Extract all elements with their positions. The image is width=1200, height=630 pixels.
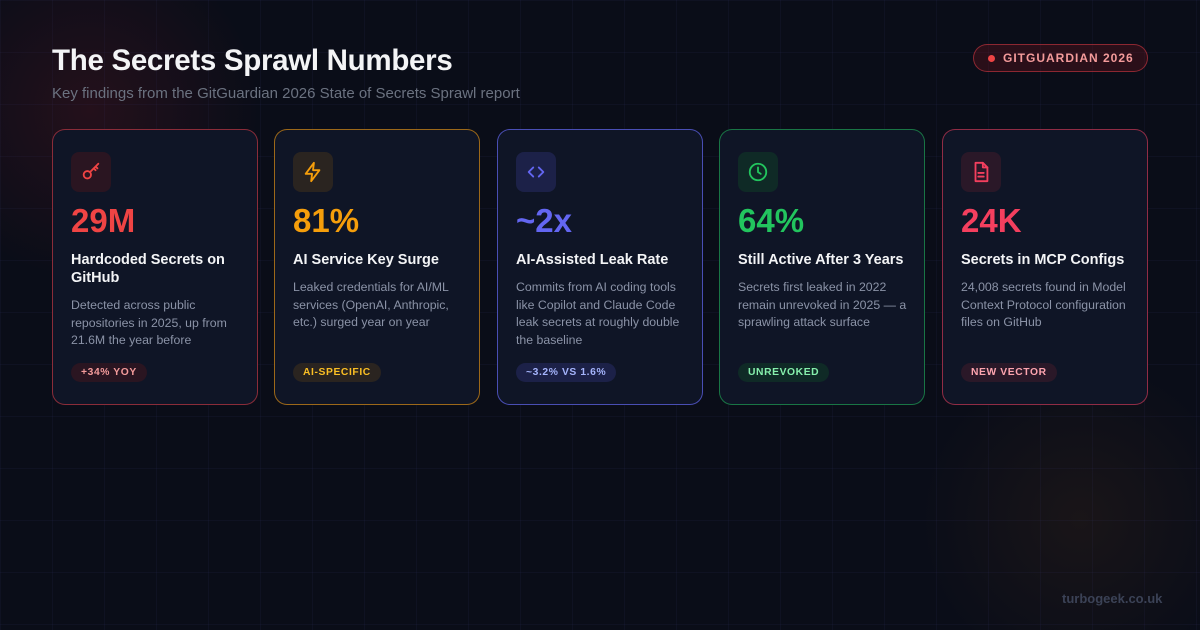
tag: NEW VECTOR <box>971 367 1047 378</box>
subtitle: Key findings from the GitGuardian 2026 State of Secrets Sprawl report <box>52 85 520 102</box>
tag <box>293 363 381 382</box>
panel: 64% <box>719 129 925 405</box>
heading: AI-Assisted Leak Rate <box>516 252 668 268</box>
tag: ~3.2% VS 1.6% <box>526 367 606 378</box>
icon: code <box>516 152 556 192</box>
heading: AI Service Key Surge <box>293 252 439 268</box>
panel: 81% <box>274 129 480 405</box>
description: 24,008 secrets found in Model Context Protocol configuration files on GitHub <box>961 280 1126 329</box>
tag <box>738 363 829 382</box>
stat: 81% <box>293 202 359 239</box>
description: Detected across public repositories in 2025, up from 21.6M the year before <box>71 298 227 347</box>
panel: 29M <box>52 129 258 405</box>
footer: turbogeek.co.uk <box>1062 591 1162 606</box>
title: The Secrets Sprawl Numbers <box>52 44 452 77</box>
description: Secrets first leaked in 2022 remain unrevoked in 2025 — a sprawling attack surface <box>738 280 906 329</box>
tag: AI-SPECIFIC <box>303 367 371 378</box>
stat: 64% <box>738 202 804 239</box>
badge: gitguardian 2026: GITGUARDIAN 2026 <box>1003 51 1134 65</box>
stat: 29M <box>71 202 135 239</box>
tag <box>961 363 1057 382</box>
icon: file <box>961 152 1001 192</box>
description: Commits from AI coding tools like Copilot and Claude Code leak secrets at roughly double the baseline <box>516 280 679 346</box>
tag: UNREVOKED <box>748 367 819 378</box>
panel: ~2x <box>497 129 703 405</box>
icon: key <box>71 152 111 192</box>
stat: ~2x <box>516 202 572 239</box>
icon: bolt <box>293 152 333 192</box>
panel: 24K <box>942 129 1148 405</box>
tag: +34% YOY <box>81 367 137 378</box>
description: Leaked credentials for AI/ML services (OpenAI, Anthropic, etc.) surged year on year <box>293 280 449 329</box>
heading: Hardcoded Secrets on GitHub <box>71 252 225 286</box>
heading: Secrets in MCP Configs <box>961 252 1124 268</box>
icon: clock <box>738 152 778 192</box>
badge: gitguardian 2026 <box>973 44 1148 72</box>
tag <box>71 363 147 382</box>
heading: Still Active After 3 Years <box>738 252 904 268</box>
tag <box>516 363 616 382</box>
stat: 24K <box>961 202 1022 239</box>
